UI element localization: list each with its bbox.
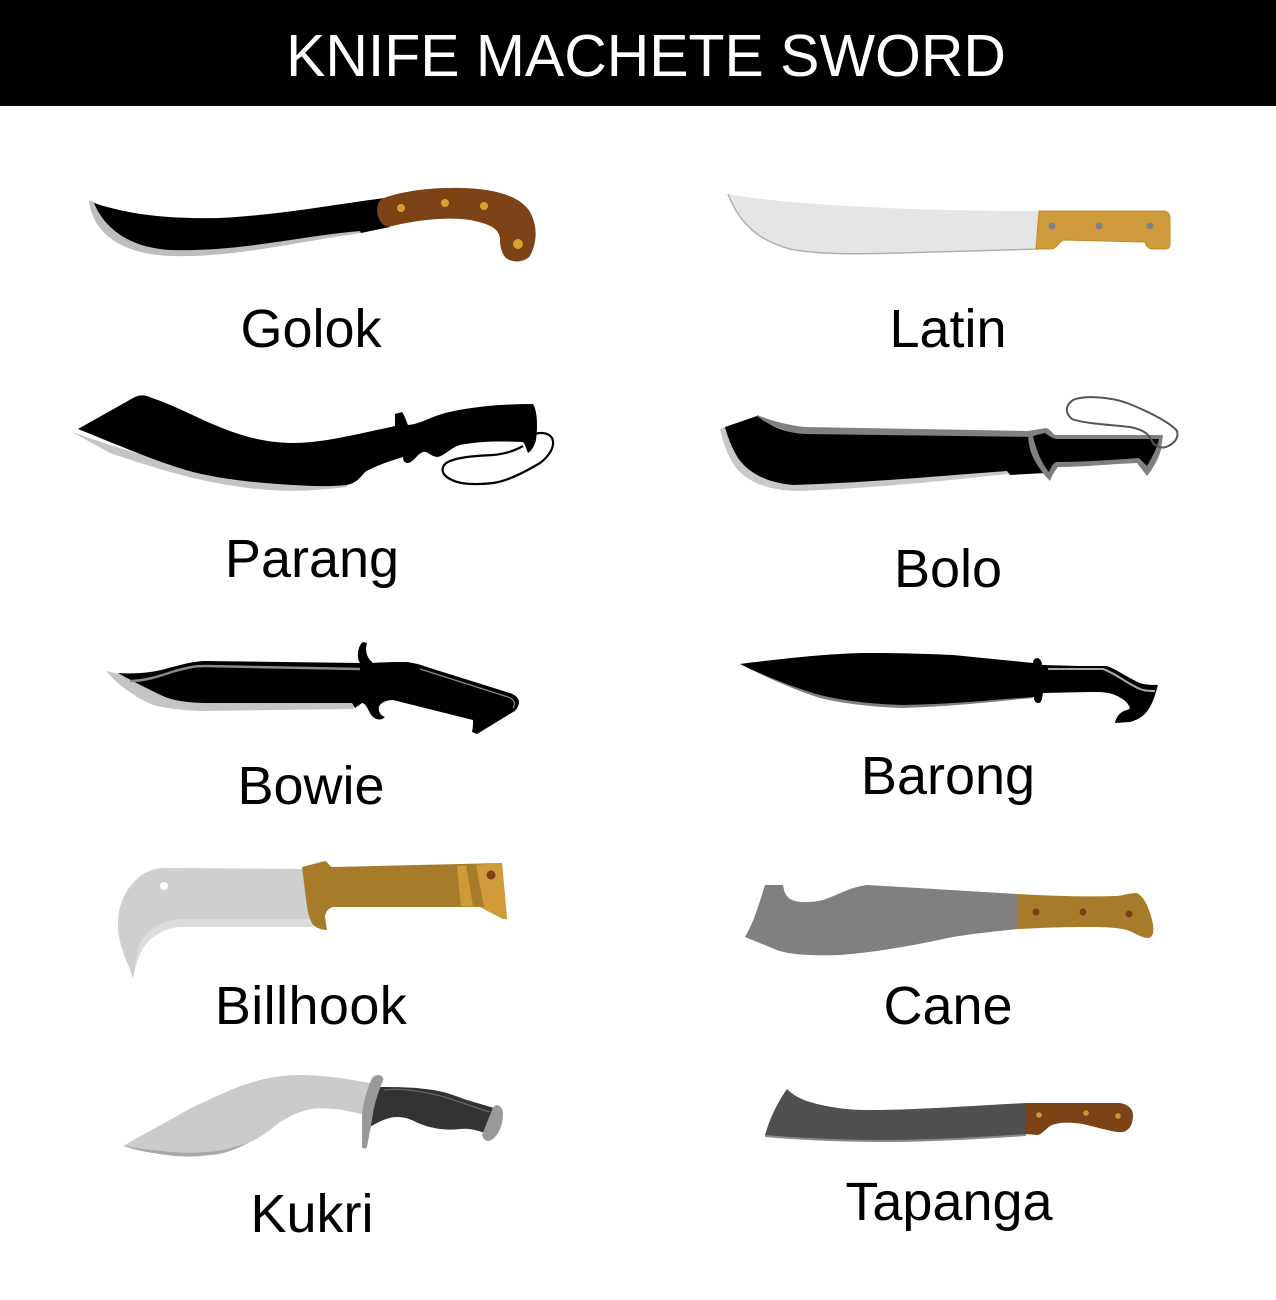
label: Cane: Cane [883, 976, 1013, 1036]
label: Kukri: Kukri [250, 1184, 374, 1244]
label: Parang: Parang [225, 529, 399, 589]
label: Tapanga: Tapanga [845, 1172, 1054, 1232]
label: Bowie: Bowie [237, 756, 385, 816]
icon: tapanga [765, 1089, 1133, 1142]
icon: barong [740, 653, 1158, 723]
icon: cane knife [745, 885, 1153, 955]
icon: bolo [720, 397, 1177, 491]
icon: billhook [118, 861, 507, 978]
icon: parang [72, 395, 553, 491]
label: Barong: Barong [861, 746, 1035, 806]
title banner: KNIFE MACHETE SWORD [286, 24, 1006, 89]
label: Latin: Latin [889, 299, 1007, 359]
label: Bolo: Bolo [894, 539, 1002, 599]
icon: golok [89, 188, 536, 261]
label: Billhook: Billhook [215, 976, 408, 1036]
label: Golok: Golok [240, 299, 383, 359]
icon: kukri [123, 1075, 503, 1156]
title banner [0, 0, 1276, 106]
icon: latin machete [728, 194, 1170, 254]
icon: bowie [106, 642, 519, 734]
